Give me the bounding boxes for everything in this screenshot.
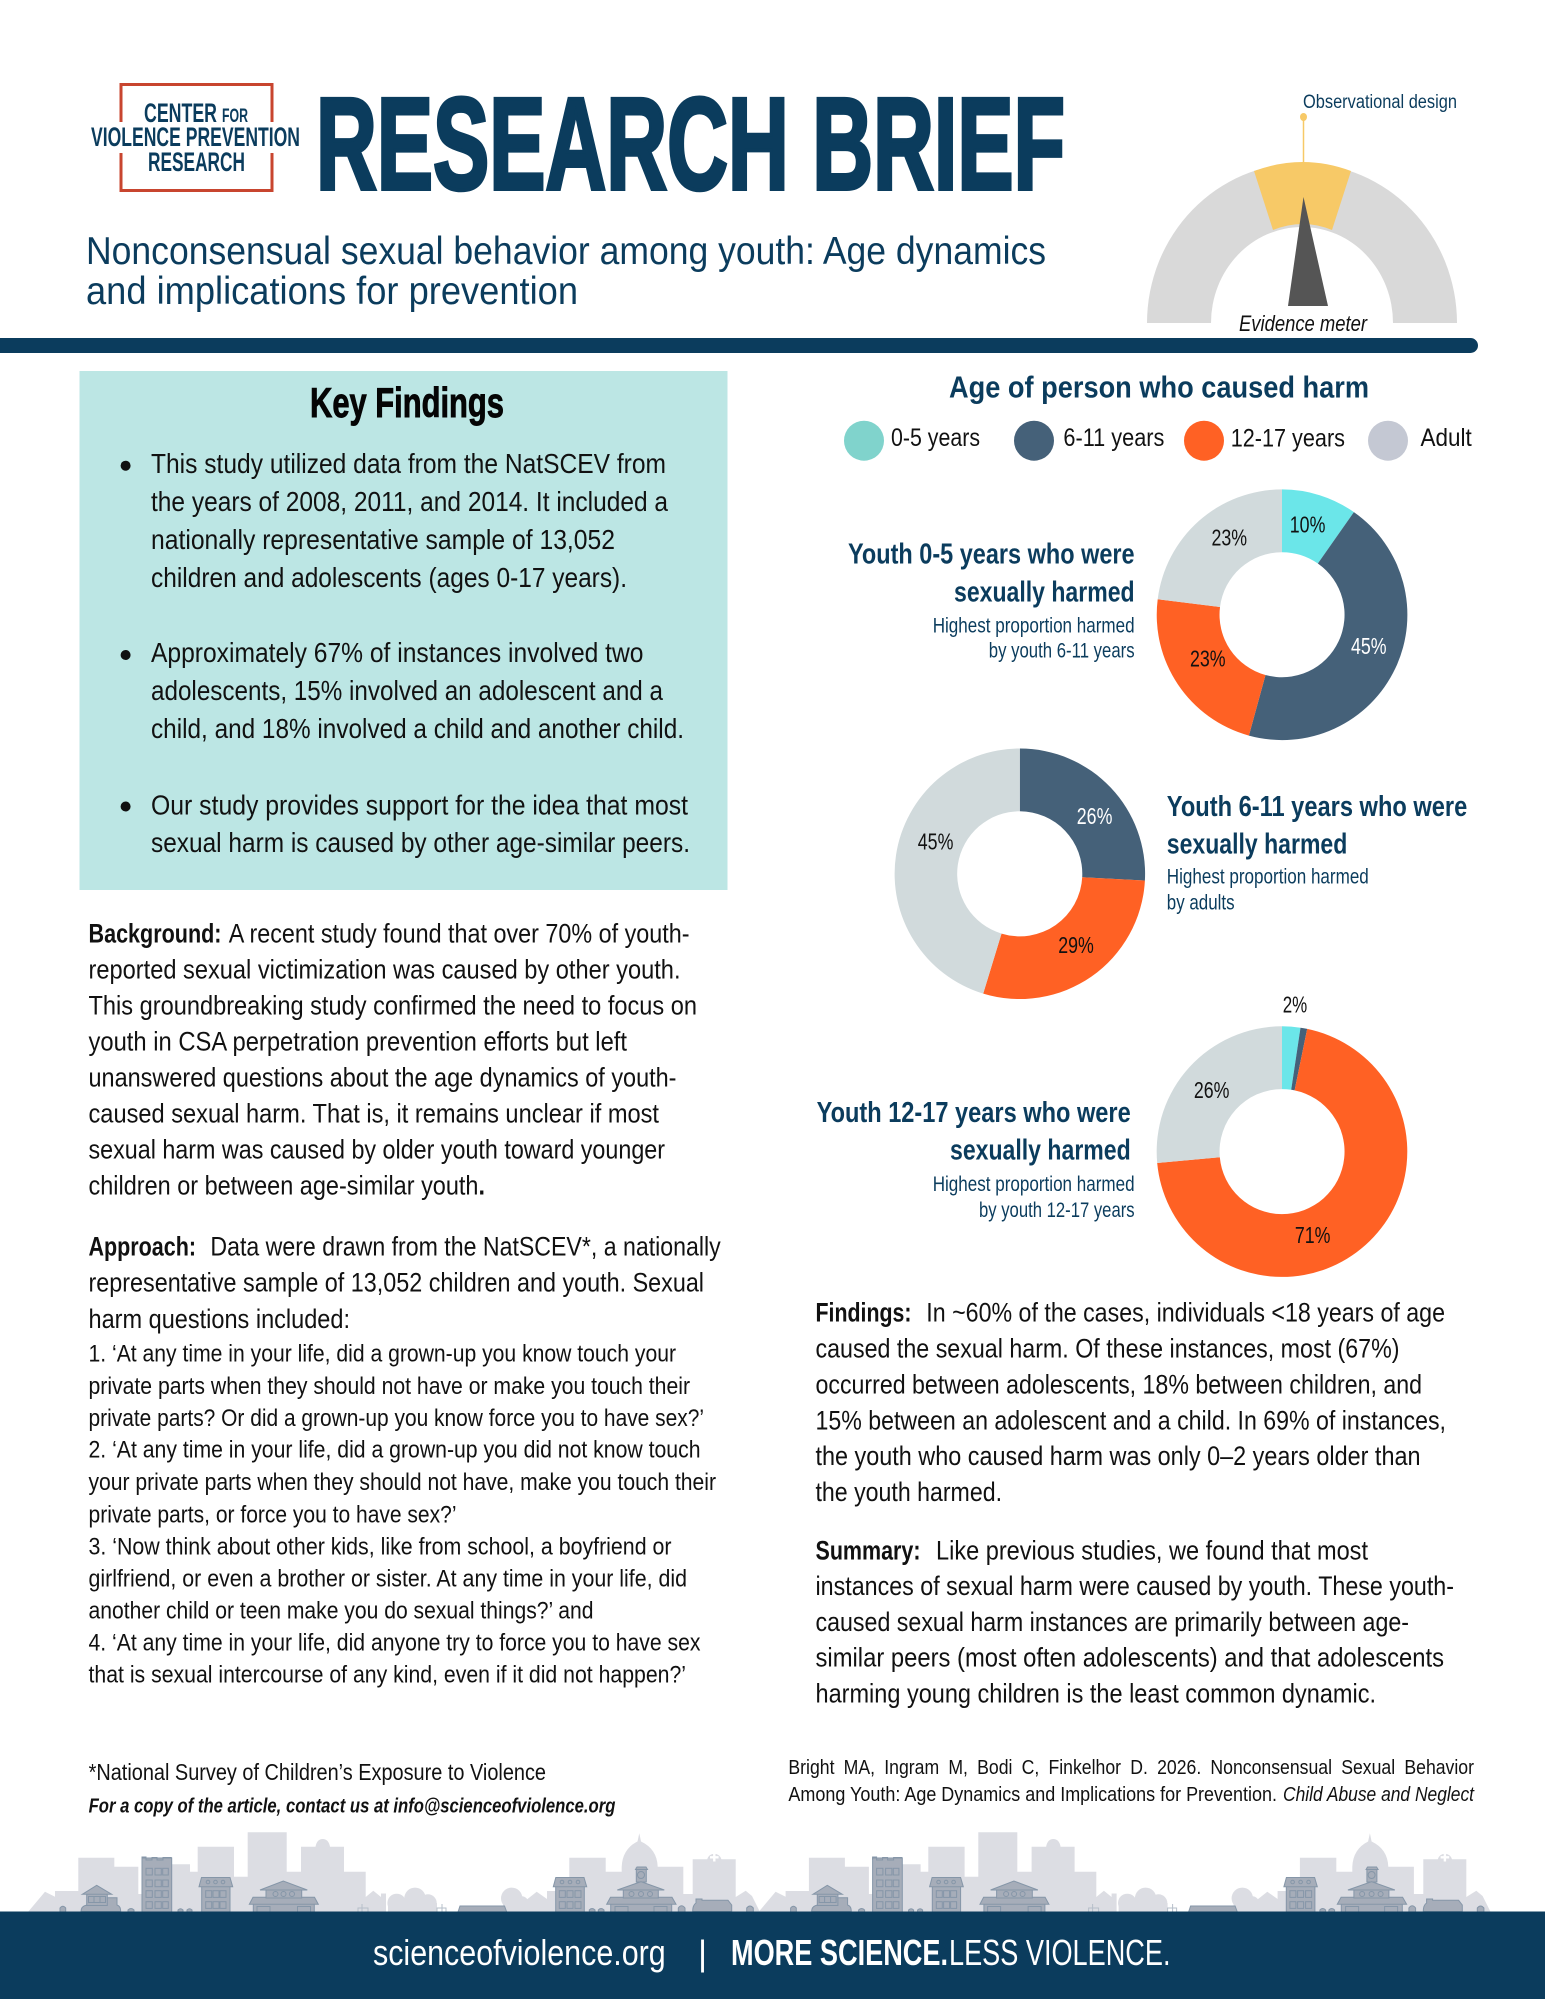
text block: approach: your private parts when they should not have, make you touch their <box>88 1469 716 1496</box>
text block: findings: occurred between adolescents, 18% between children, and <box>816 1369 1422 1399</box>
label: youth 12-17 years <box>817 1097 1135 1222</box>
donut chart: youth 6-11 years: 29% <box>1058 932 1094 958</box>
text block: background <box>88 919 697 1200</box>
donut chart: youth 6-11 years: 26% <box>1077 803 1112 829</box>
text block: background: caused sexual harm. That is, it remains unclear if most <box>88 1098 660 1128</box>
label: youth 12-17 years: Youth 12-17 years who were <box>817 1097 1131 1129</box>
text block: findings <box>816 1298 1446 1507</box>
skyline illustration <box>28 1832 1491 1912</box>
text block: background: This groundbreaking study confirmed the need to focus on <box>88 990 697 1020</box>
donut chart: youth 6-11 years: 45% <box>918 828 953 854</box>
panel: key findings <box>80 371 728 890</box>
logo: Center for Violence Prevention Research: CENTER <box>144 98 217 128</box>
chart heading: age of person who caused harm: Age of person who caused harm <box>949 370 1369 405</box>
legend: 12-17 years <box>1231 424 1345 452</box>
text block: findings: the youth who caused harm was only 0–2 years older than <box>816 1441 1420 1471</box>
label: youth 6-11 years <box>1167 791 1467 914</box>
text block: approach: private parts when they should not have or make you touch their <box>88 1373 690 1400</box>
text block: summary: similar peers (most often adolescents) and that adolescents <box>816 1643 1444 1673</box>
text block: approach: Data were drawn from the NatSCEV*, a nationally <box>210 1232 721 1262</box>
text block: approach: another child or teen make you do sexual things?’ and <box>88 1597 594 1624</box>
footer band <box>0 1912 1545 1999</box>
text block: approach: girlfriend, or even a brother or sister. At any time in your life, did <box>88 1566 687 1593</box>
text block: approach: that is sexual intercourse of any kind, even if it did not happen?’ <box>88 1662 686 1689</box>
text block: approach: representative sample of 13,052 children and youth. Sexual <box>88 1268 704 1298</box>
finding 2: Approximately 67% of instances involved two <box>151 637 644 668</box>
label: youth 6-11 years: sexually harmed <box>1167 829 1347 861</box>
footer band: | <box>698 1934 707 1973</box>
text block: background: children or between age-similar youth. <box>88 1170 485 1200</box>
text block: approach: 4. ‘At any time in your life, did anyone try to force you to have sex <box>88 1630 700 1657</box>
text block: approach: private parts? Or did a grown-up you know force you to have sex?’ <box>88 1405 704 1432</box>
donut chart: youth 0-5 years: 23% <box>1190 646 1226 672</box>
legend: 6-11 years <box>1063 424 1164 452</box>
donut chart: youth 6-11 years <box>895 748 1145 999</box>
text block: background: reported sexual victimization was caused by other youth. <box>88 954 680 984</box>
donut chart: youth 0-5 years: 45% <box>1351 633 1387 659</box>
legend <box>844 421 1472 461</box>
heading: key findings: Key Findings <box>310 379 504 426</box>
title: Research Brief: RESEARCH BRIEF <box>316 70 1065 217</box>
footnote: survey name and contact: *National Survey of Children’s Exposure to Violence <box>89 1759 546 1785</box>
label: youth 0-5 years: Youth 0-5 years who were <box>848 539 1135 571</box>
label: youth 0-5 years: Highest proportion harmed <box>933 614 1135 637</box>
label: youth 6-11 years: Youth 6-11 years who were <box>1167 791 1467 823</box>
donut chart: youth 12-17 years: 2% <box>1283 992 1307 1018</box>
finding 1: nationally representative sample of 13,052 <box>151 524 615 555</box>
text block: summary: instances of sexual harm were caused by youth. These youth- <box>816 1571 1454 1601</box>
logo: Center for Violence Prevention Research <box>91 84 300 190</box>
finding 1: children and adolescents (ages 0-17 years). <box>151 562 627 593</box>
finding 3: sexual harm is caused by other age-similar peers. <box>151 827 690 858</box>
donut chart: youth 0-5 years <box>1157 489 1407 740</box>
text block: summary <box>816 1535 1454 1709</box>
header divider bar <box>0 338 1478 353</box>
text block: approach <box>88 1232 721 1689</box>
finding 2: child, and 18% involved a child and another child. <box>151 713 684 744</box>
label: youth 0-5 years: sexually harmed <box>954 577 1135 609</box>
text block: background: Background: <box>88 919 222 949</box>
finding 1 <box>121 448 669 593</box>
subtitle <box>86 230 1046 313</box>
text block: approach: 1. ‘At any time in your life, did a grown-up you know touch your <box>88 1341 676 1368</box>
footer band: LESS VIOLENCE. <box>949 1932 1170 1973</box>
text block: findings: Findings: <box>816 1298 912 1328</box>
label: youth 0-5 years <box>848 539 1135 663</box>
evidence meter gauge: Evidence meter <box>1239 311 1368 336</box>
logo: Center for Violence Prevention Research: FOR <box>222 106 248 127</box>
donut chart: youth 12-17 years <box>1157 992 1407 1277</box>
text block: findings: the youth harmed. <box>816 1477 1002 1507</box>
text block: approach: Approach: <box>88 1232 196 1262</box>
label: youth 0-5 years: by youth 6-11 years <box>989 640 1135 663</box>
text block: approach: 2. ‘At any time in your life, did a grown-up you did not know touch <box>88 1437 700 1464</box>
footer band: MORE SCIENCE. <box>731 1932 948 1973</box>
logo: Center for Violence Prevention Research: RESEARCH <box>148 147 245 177</box>
donut chart: youth 0-5 years: 23% <box>1212 525 1247 551</box>
subtitle: Nonconsensual sexual behavior among youth: Age dynamics <box>86 230 1046 273</box>
label: youth 6-11 years: by adults <box>1167 891 1235 914</box>
text block: summary: Summary: <box>816 1535 920 1565</box>
donut chart: youth 0-5 years: 10% <box>1290 512 1325 538</box>
legend: 0-5 years <box>891 424 980 452</box>
label: youth 12-17 years: sexually harmed <box>950 1135 1131 1167</box>
text block: findings: caused the sexual harm. Of these instances, most (67%) <box>816 1333 1400 1363</box>
text block: approach: 3. ‘Now think about other kids, like from school, a boyfriend or <box>88 1533 672 1560</box>
text block: background: unanswered questions about the age dynamics of youth- <box>88 1062 676 1092</box>
logo: Center for Violence Prevention Research: VIOLENCE PREVENTION <box>91 122 300 152</box>
text block: summary: harming young children is the least common dynamic. <box>816 1679 1376 1709</box>
finding 2 <box>121 637 684 744</box>
citation: Among Youth: Age Dynamics and Implications for Prevention. <box>788 1783 1277 1806</box>
text block: approach: private parts, or force you to have sex?’ <box>88 1501 456 1528</box>
text block: findings: In ~60% of the cases, individuals <18 years of age <box>926 1298 1445 1328</box>
label: youth 12-17 years: by youth 12-17 years <box>979 1199 1135 1222</box>
footnote: survey name and contact <box>89 1759 615 1818</box>
finding 1: the years of 2008, 2011, and 2014. It included a <box>151 486 669 517</box>
donut chart: youth 12-17 years: 71% <box>1295 1222 1330 1248</box>
finding 3 <box>121 790 690 858</box>
evidence meter gauge: Observational design <box>1303 92 1457 113</box>
text block: findings: 15% between an adolescent and a child. In 69% of instances, <box>816 1405 1446 1435</box>
footer band: scienceofviolence.org <box>373 1932 666 1973</box>
citation <box>788 1756 1475 1806</box>
text block: background: youth in CSA perpetration prevention efforts but left <box>88 1027 628 1057</box>
citation: Child Abuse and Neglect <box>1283 1783 1475 1806</box>
finding 3: Our study provides support for the idea that most <box>151 790 688 820</box>
finding 1: This study utilized data from the NatSCEV from <box>151 448 666 479</box>
subtitle: and implications for prevention <box>86 270 578 313</box>
label: youth 6-11 years: Highest proportion harmed <box>1167 866 1369 889</box>
text block: summary: caused sexual harm instances are primarily between age- <box>816 1607 1409 1637</box>
label: youth 12-17 years: Highest proportion harmed <box>933 1173 1135 1196</box>
legend: Adult <box>1420 424 1472 452</box>
text block: background: A recent study found that over 70% of youth- <box>229 919 689 949</box>
donut chart: youth 12-17 years: 26% <box>1194 1077 1229 1103</box>
text block: summary: Like previous studies, we found that most <box>936 1535 1369 1565</box>
footnote: survey name and contact: For a copy of the article, contact us at info@scienceofviolence.org <box>89 1796 615 1818</box>
text block: background: sexual harm was caused by older youth toward younger <box>88 1134 665 1164</box>
evidence meter gauge <box>1147 92 1457 336</box>
finding 2: adolescents, 15% involved an adolescent and a <box>151 675 664 706</box>
text block: approach: harm questions included: <box>88 1304 350 1334</box>
